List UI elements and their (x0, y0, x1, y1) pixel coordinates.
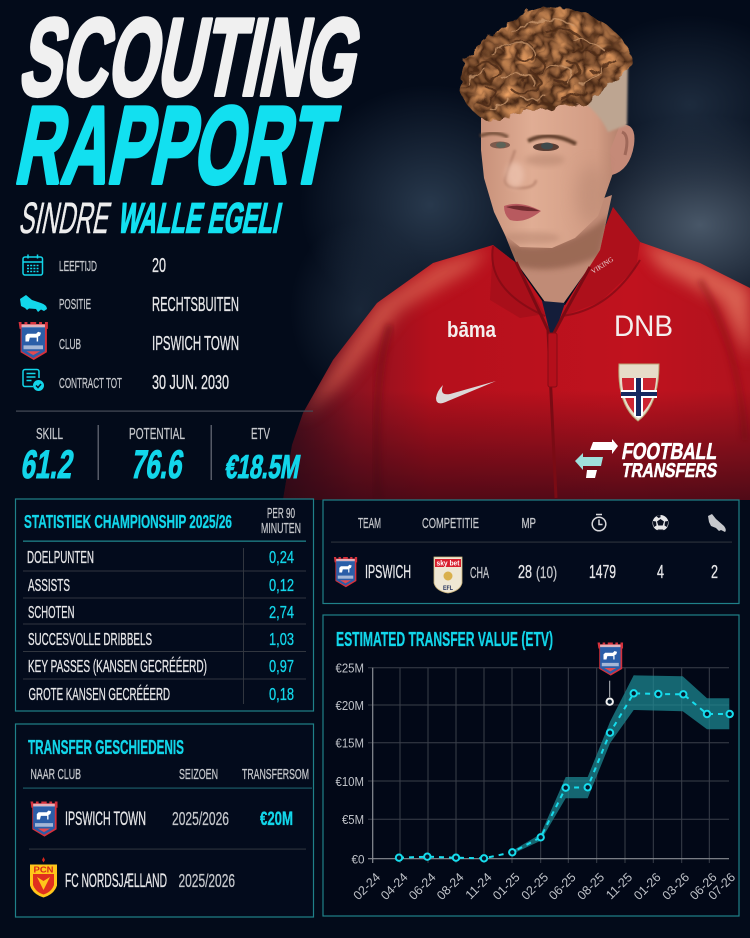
row: schoten: 2,74 (269, 602, 294, 622)
zipper (516, 262, 590, 498)
x axis labels: 06-26 (687, 870, 720, 903)
gridlines (368, 668, 729, 863)
icon: boot (20, 295, 47, 312)
row: contract tot (59, 372, 229, 394)
icon: ipswich crest (19, 322, 48, 360)
icon: nordsjaelland crest (30, 857, 57, 898)
player name: SINDRE (16, 194, 115, 243)
competition code: CHA (470, 565, 489, 582)
row: succesvolle dribbels: SUCCESVOLLE DRIBBELS (28, 629, 152, 649)
icon: contract (23, 370, 44, 391)
table header: COMPETITIE (422, 515, 479, 532)
minutes: 1479 (589, 561, 616, 582)
row: leeftijd (59, 255, 166, 277)
table header: MP (522, 515, 536, 532)
row: ipswich town (30, 802, 293, 837)
sponsor: Viking: VIKING (590, 255, 615, 276)
sponsor: DNB: DNB (614, 310, 673, 343)
icon: football (652, 515, 668, 531)
logo: Football Transfers: TRANSFERS (620, 460, 719, 482)
x axis labels: 03-26 (660, 870, 692, 903)
score: etv: €18.5M (223, 449, 303, 486)
value line (399, 693, 730, 858)
row: key passes: KEY PASSES (KANSEN GECRÉÉERD) (28, 656, 207, 676)
row: club: IPSWICH TOWN (152, 333, 239, 355)
x axis labels: 07-26 (706, 870, 738, 903)
x axis labels: 06-24 (406, 870, 439, 903)
row: positie (59, 294, 239, 316)
panel: team stats (323, 500, 739, 604)
table header: NAAR CLUB (30, 767, 81, 783)
row: leeftijd: LEEFTIJD (59, 259, 97, 275)
x axis labels: 06-25 (546, 870, 579, 903)
x axis labels: 01-26 (631, 870, 664, 903)
icon: efl championship badge: sky bet (436, 558, 460, 568)
y axis labels: €10M (336, 774, 364, 789)
panel: estimated transfer value chart (323, 615, 739, 916)
score: etv: ETV (251, 426, 270, 443)
score: potential (128, 426, 187, 487)
neck and inner shirt (500, 195, 612, 333)
x axis labels: 11-24 (463, 870, 495, 902)
title (8, 0, 372, 243)
row: fc nordsjaelland (30, 857, 235, 898)
table header: TEAM (358, 515, 381, 532)
row: key passes: 0,97 (269, 656, 294, 676)
score: potential: POTENTIAL (129, 426, 185, 443)
sponsor: bama: bāma (447, 317, 497, 342)
score: skill: 61.2 (18, 442, 77, 487)
y axis labels: €15M (336, 736, 364, 750)
row: assists: 0,12 (269, 575, 294, 595)
row: doelpunten: DOELPUNTEN (27, 547, 94, 567)
logo: Football Transfers (575, 438, 720, 482)
panel heading: TRANSFER GESCHIEDENIS (28, 737, 184, 759)
row: schoten (28, 602, 294, 622)
panel: championship stats (16, 499, 314, 711)
row: positie: RECHTSBUITEN (152, 294, 239, 316)
data points (396, 690, 733, 862)
row: leeftijd: 20 (152, 255, 166, 277)
y axis labels: €20M (336, 698, 364, 713)
row: ipswich town: IPSWICH TOWN (65, 809, 146, 830)
goals: 4 (657, 561, 664, 582)
panel heading: STATISTIEK CHAMPIONSHIP 2025/26 (24, 511, 232, 532)
icon: efl championship badge (434, 557, 462, 593)
hair (452, 2, 637, 132)
x axis labels: 02-25 (519, 870, 551, 903)
icon: stopwatch (592, 514, 606, 531)
icon: calendar (23, 254, 42, 275)
column heading: per 90 minuten: PER 90 (267, 505, 295, 522)
icon: boot (708, 514, 726, 532)
row: doelpunten: 0,24 (269, 547, 294, 567)
x axis labels (351, 870, 738, 903)
score: skill (18, 426, 77, 487)
chart title: ESTIMATED TRANSFER VALUE (ETV) (336, 628, 553, 651)
row: club (59, 333, 239, 355)
team name: IPSWICH (365, 561, 411, 582)
row: grote kansen: GROTE KANSEN GECRÉÉERD (28, 684, 170, 704)
x axis labels: 08-25 (575, 870, 607, 903)
icon: nordsjaelland crest: PCN (34, 866, 54, 874)
x axis labels: 02-24 (351, 870, 383, 903)
x axis labels: 04-24 (378, 870, 411, 903)
jacket (283, 207, 750, 500)
assists: 2 (711, 561, 718, 582)
table header (30, 767, 309, 783)
title line: rapport: RAPPORT (8, 83, 346, 207)
confidence band (512, 675, 729, 854)
y axis labels: €25M (336, 660, 364, 676)
transfer marker (598, 642, 623, 705)
row: ipswich town: 2025/2026 (172, 809, 229, 829)
y axis labels: €0 (352, 852, 365, 866)
row: ipswich town: €20M (260, 809, 293, 830)
player name (16, 194, 286, 243)
score: potential: 76.6 (128, 442, 187, 487)
row: assists: ASSISTS (28, 575, 70, 595)
x axis labels: 11-25 (603, 870, 635, 902)
x axis labels: 01-25 (490, 870, 523, 903)
column heading: per 90 minuten: MINUTEN (261, 520, 301, 537)
table header: TRANSFERSOM (242, 767, 309, 783)
icon: ipswich crest (30, 802, 58, 837)
face (480, 90, 634, 248)
row: contract tot: 30 JUN. 2030 (152, 372, 229, 394)
row: contract tot: CONTRACT TOT (59, 376, 122, 392)
icon: nike swoosh (436, 381, 496, 403)
player info list (19, 254, 239, 394)
key scores (18, 425, 303, 487)
player name: WALLE EGELI (115, 195, 286, 242)
y axis labels: €5M (342, 812, 364, 827)
row: doelpunten (27, 547, 294, 567)
matches played (518, 561, 557, 582)
x axis labels: 08-24 (434, 870, 467, 903)
player photo (283, 2, 750, 500)
row: schoten: SCHOTEN (28, 602, 74, 622)
row: club: CLUB (59, 337, 81, 353)
row: succesvolle dribbels: 1,03 (269, 629, 294, 649)
row: positie: POSITIE (59, 297, 91, 313)
table header (358, 515, 536, 532)
matches played: 28 (518, 561, 532, 582)
matches played: (10) (536, 563, 557, 582)
row: fc nordsjaelland: 2025/2026 (178, 871, 235, 891)
y axis labels (336, 660, 365, 866)
icon: efl championship badge: EFL (443, 585, 453, 592)
row: fc nordsjaelland: FC NORDSJÆLLAND (65, 871, 167, 892)
axes (368, 668, 729, 863)
row: assists (28, 575, 294, 595)
crest: Norway (619, 364, 659, 421)
table header: SEIZOEN (179, 767, 218, 783)
icon: ipswich crest (334, 557, 357, 587)
score: skill: SKILL (36, 426, 63, 443)
panel: transfer history (16, 724, 314, 917)
score: etv (223, 426, 303, 486)
column heading: per 90 minuten (261, 505, 301, 537)
logo: Football Transfers: FOOTBALL (620, 438, 720, 464)
row: grote kansen: 0,18 (269, 684, 294, 704)
